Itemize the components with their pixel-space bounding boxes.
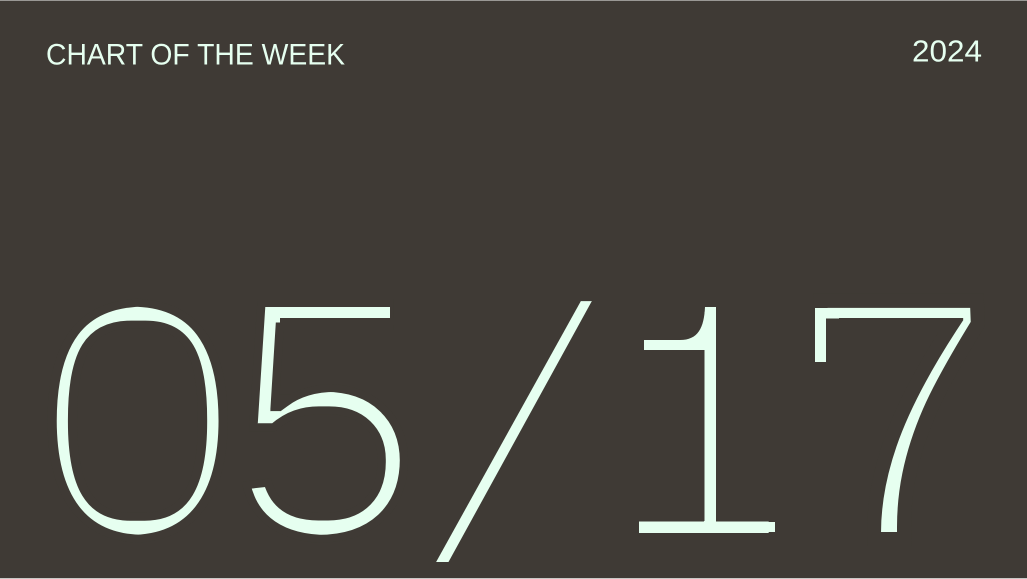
year: 2024 [912, 34, 982, 68]
title: CHART OF THE WEEK [46, 38, 345, 72]
large date: 05/17 [30, 224, 1008, 579]
